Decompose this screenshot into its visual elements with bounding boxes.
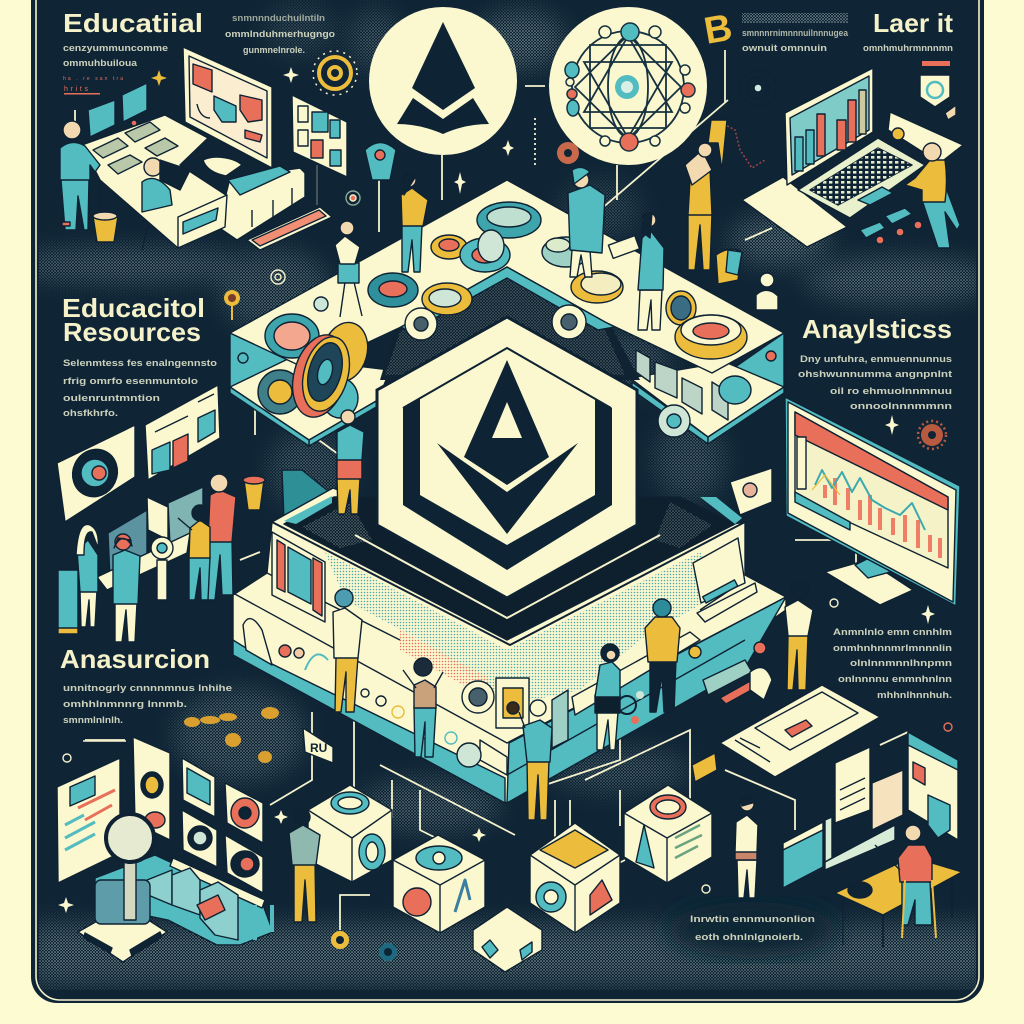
yellow desk bbox=[835, 857, 962, 948]
text block: right lower: Anmnlnlo emn cnnhlm bbox=[833, 627, 952, 638]
person cream center bbox=[735, 796, 758, 898]
person: yellow top bbox=[401, 173, 428, 272]
person: teal robe bbox=[568, 167, 605, 277]
heading: Educatiial: Educatiial bbox=[63, 8, 203, 38]
arch badge bbox=[243, 619, 328, 670]
person right bbox=[785, 581, 813, 690]
right card bbox=[888, 112, 963, 163]
person: woman teal top bbox=[608, 212, 664, 330]
cube 4 bbox=[530, 823, 620, 933]
icon: sun badge bbox=[313, 51, 357, 95]
teal crates bbox=[95, 855, 273, 945]
heading: Anaylsticss: Dny unfuhra, enmuennunnus bbox=[800, 354, 952, 365]
panel A bbox=[57, 425, 135, 522]
laptop station: top right bbox=[720, 61, 963, 248]
paper bbox=[835, 747, 870, 823]
people on upper platform bbox=[335, 120, 778, 330]
person teal front bbox=[519, 700, 552, 820]
bin bbox=[93, 212, 118, 242]
small screens bbox=[88, 83, 147, 143]
icon: virus gear bbox=[918, 421, 946, 449]
person coral bbox=[206, 474, 236, 600]
main plate bbox=[230, 180, 784, 373]
lower left resource group bbox=[57, 737, 273, 962]
person yellow top bbox=[645, 599, 680, 712]
heading: Anaylsticss bbox=[798, 314, 953, 412]
heading: Anasurcion: Anasurcion bbox=[60, 644, 210, 674]
lower right group bbox=[720, 685, 962, 948]
icons: bottom badges bbox=[331, 931, 397, 961]
text block: top center left bbox=[225, 13, 335, 56]
heading: Laer it bbox=[742, 8, 953, 54]
hex outline rail bbox=[355, 535, 660, 618]
icon: yellow tag bbox=[692, 753, 717, 782]
keyboard card bbox=[720, 685, 880, 777]
person far left bbox=[76, 524, 98, 627]
icon board bbox=[292, 95, 347, 205]
heading: Laer it: omnhmuhrmnnnmn bbox=[863, 43, 953, 54]
small dots on ledge bbox=[361, 689, 481, 767]
poster with face bbox=[496, 678, 529, 728]
cabinet bbox=[218, 166, 305, 240]
platform sides bbox=[230, 333, 784, 388]
text block: right lower: onmhnhnnmrlmnnnlin bbox=[833, 643, 952, 654]
circle card bbox=[151, 537, 173, 600]
heading: Educacitol Resources: Educacitol bbox=[62, 293, 205, 323]
back teal wall bbox=[282, 470, 333, 520]
tall card bbox=[133, 737, 170, 840]
large monitor bbox=[183, 47, 272, 176]
chevron mark bbox=[437, 443, 578, 534]
central hexagon logo bbox=[355, 317, 660, 618]
teal front right bbox=[507, 597, 786, 803]
cubes bbox=[289, 785, 758, 972]
wall screen bbox=[272, 532, 325, 622]
wall dots bbox=[325, 552, 725, 705]
inner well bbox=[380, 270, 640, 380]
heading: Laer it: ownuit omnnuin bbox=[742, 43, 827, 54]
heading: Anasurcion: smnmlnlnlh. bbox=[63, 715, 123, 726]
tag: label: RU bbox=[310, 741, 327, 755]
heading: Anaylsticss: oil ro ehmuolnnmnuu bbox=[830, 386, 952, 397]
pink paper bbox=[872, 770, 903, 830]
map dots bbox=[184, 707, 279, 763]
heading: Anasurcion: unnitnogrly cnnnnmnus lnhihe bbox=[63, 683, 232, 694]
heading: Educatiial: hrits bbox=[64, 86, 88, 93]
heading: Educacitol Resources bbox=[62, 293, 217, 419]
person teal woman bbox=[113, 534, 140, 642]
icon: coral gear bbox=[557, 142, 579, 164]
heading: Laer it: Laer it bbox=[873, 8, 953, 38]
text block: bottom caption: lnrwtin ennmunonlion bbox=[690, 914, 815, 925]
screens bbox=[97, 487, 203, 590]
text block: right lower: mhhnlhnnhuh. bbox=[877, 690, 952, 701]
text block: bottom caption bbox=[667, 902, 837, 958]
person in yellow bbox=[905, 143, 960, 248]
heading: Educacitol Resources: Selenmtess fes enalngennsto bbox=[63, 358, 217, 369]
door frame bbox=[552, 690, 568, 748]
bin bbox=[243, 476, 265, 510]
heading: Anaylsticss: Anaylsticss bbox=[802, 314, 952, 344]
line chart bbox=[812, 470, 940, 558]
heading: Educatiial: ommuhbuiloua bbox=[63, 58, 138, 69]
ledge line bbox=[233, 593, 786, 743]
coin stack bbox=[258, 317, 374, 423]
triangle mark bbox=[464, 360, 549, 485]
lower platform bbox=[233, 470, 786, 803]
heading: Educacitol Resources: oulenruntmntion bbox=[63, 393, 160, 404]
person coral bbox=[875, 825, 936, 938]
cube 5 bbox=[624, 785, 712, 883]
icon: small target bbox=[63, 191, 952, 893]
data beads bbox=[860, 208, 922, 244]
heading: Anaylsticss: ohshwunnumma angnpnlnt bbox=[798, 369, 953, 380]
icons: sparkles bbox=[58, 67, 935, 913]
cube 1 bbox=[308, 785, 392, 882]
tag: label bbox=[303, 728, 333, 763]
heading: Educatiial bbox=[63, 8, 203, 94]
analytics monitor bbox=[785, 397, 960, 606]
shield ornament bbox=[716, 249, 742, 284]
upper platform bbox=[230, 180, 784, 446]
text block: bottom caption: eoth ohnlnlgnoierb. bbox=[695, 932, 803, 943]
text block: right lower: onlnnnnu enmnhnlnn bbox=[838, 674, 952, 685]
base bbox=[78, 905, 167, 962]
person standing bbox=[60, 121, 100, 230]
laptop screen bbox=[785, 68, 873, 185]
tag with chart bbox=[730, 468, 772, 515]
laptop base bbox=[798, 138, 925, 218]
top circle atom bbox=[549, 7, 707, 165]
person arms raised bbox=[403, 658, 443, 757]
person: teal skirt bbox=[335, 221, 362, 317]
panel B bbox=[145, 385, 220, 480]
person yellow by cube bbox=[289, 809, 320, 922]
stand bbox=[825, 560, 913, 605]
heading: Educatiial: ha . re san tra bbox=[63, 76, 123, 82]
icon: lollipop bbox=[224, 290, 240, 320]
teal panel bbox=[783, 817, 895, 888]
text block: right lower: olnlnnmnnlhnpmn bbox=[850, 658, 952, 669]
text block: top center left: gunmnelnrole. bbox=[243, 45, 305, 56]
lower plates bbox=[230, 358, 390, 440]
magnifier bbox=[95, 814, 154, 924]
laptop bbox=[693, 538, 757, 622]
well interior bbox=[284, 497, 735, 640]
cream mat bbox=[742, 177, 847, 247]
workstation: top left bbox=[60, 47, 347, 250]
shield icon bbox=[920, 61, 956, 120]
heading: Educatiial: cenzyummuncomme bbox=[63, 43, 168, 54]
text block: right lower bbox=[833, 627, 952, 701]
small figure bbox=[756, 273, 778, 310]
cube 2 bbox=[393, 835, 485, 933]
left group: panels and people bbox=[57, 385, 265, 642]
frame bbox=[403, 398, 612, 570]
icon: bitcoin: B bbox=[701, 7, 735, 53]
side decorations bbox=[238, 297, 776, 363]
image cards bbox=[182, 758, 215, 817]
person teal over platform bbox=[337, 410, 364, 514]
teal front left bbox=[233, 640, 505, 803]
heading: Anaylsticss: onnoolnnnmmnn bbox=[850, 401, 952, 412]
goods cluster bbox=[689, 642, 772, 704]
text block: top center left: snmnnnduchuilntiln bbox=[232, 13, 325, 24]
window card bbox=[908, 732, 958, 840]
red map trace bbox=[720, 122, 765, 168]
platform body bbox=[233, 488, 786, 803]
fixtures on lower platform bbox=[243, 410, 813, 820]
document card bbox=[57, 758, 120, 883]
connector lines bbox=[75, 50, 908, 930]
small red node bbox=[618, 691, 644, 724]
person: yellow pair bbox=[685, 120, 727, 270]
heading: Laer it: smnnnrnimnnnuilnnnugea bbox=[742, 28, 849, 39]
text block: top center left: ommlnduhmerhugngo bbox=[225, 29, 335, 40]
desk bbox=[82, 115, 226, 250]
person yellow bbox=[178, 505, 210, 600]
connector small bbox=[83, 740, 126, 742]
person seated bbox=[142, 158, 190, 212]
heading: Anasurcion: omhhlnmnnrg lnnmb. bbox=[63, 699, 187, 710]
teal ring icon bbox=[740, 70, 776, 106]
front drawer bbox=[178, 195, 227, 248]
heading: Anasurcion bbox=[60, 644, 232, 726]
cards under right plate bbox=[636, 350, 751, 420]
keyboard bbox=[247, 207, 332, 250]
heading: Educacitol Resources: rfrig omrfo esenmuntolo bbox=[63, 376, 198, 387]
heading: Educacitol Resources: ohsfkhrfo. bbox=[63, 408, 118, 419]
icon: hanging tassel bbox=[365, 142, 396, 180]
barrel bbox=[58, 570, 78, 634]
person teal top woman bbox=[595, 644, 620, 750]
person cream top bbox=[333, 589, 362, 712]
heading: Educacitol Resources: Resources bbox=[63, 317, 201, 347]
top circle logo bbox=[369, 7, 517, 155]
body bbox=[785, 397, 960, 606]
cube 3 bbox=[473, 907, 542, 972]
coins bbox=[265, 202, 747, 437]
